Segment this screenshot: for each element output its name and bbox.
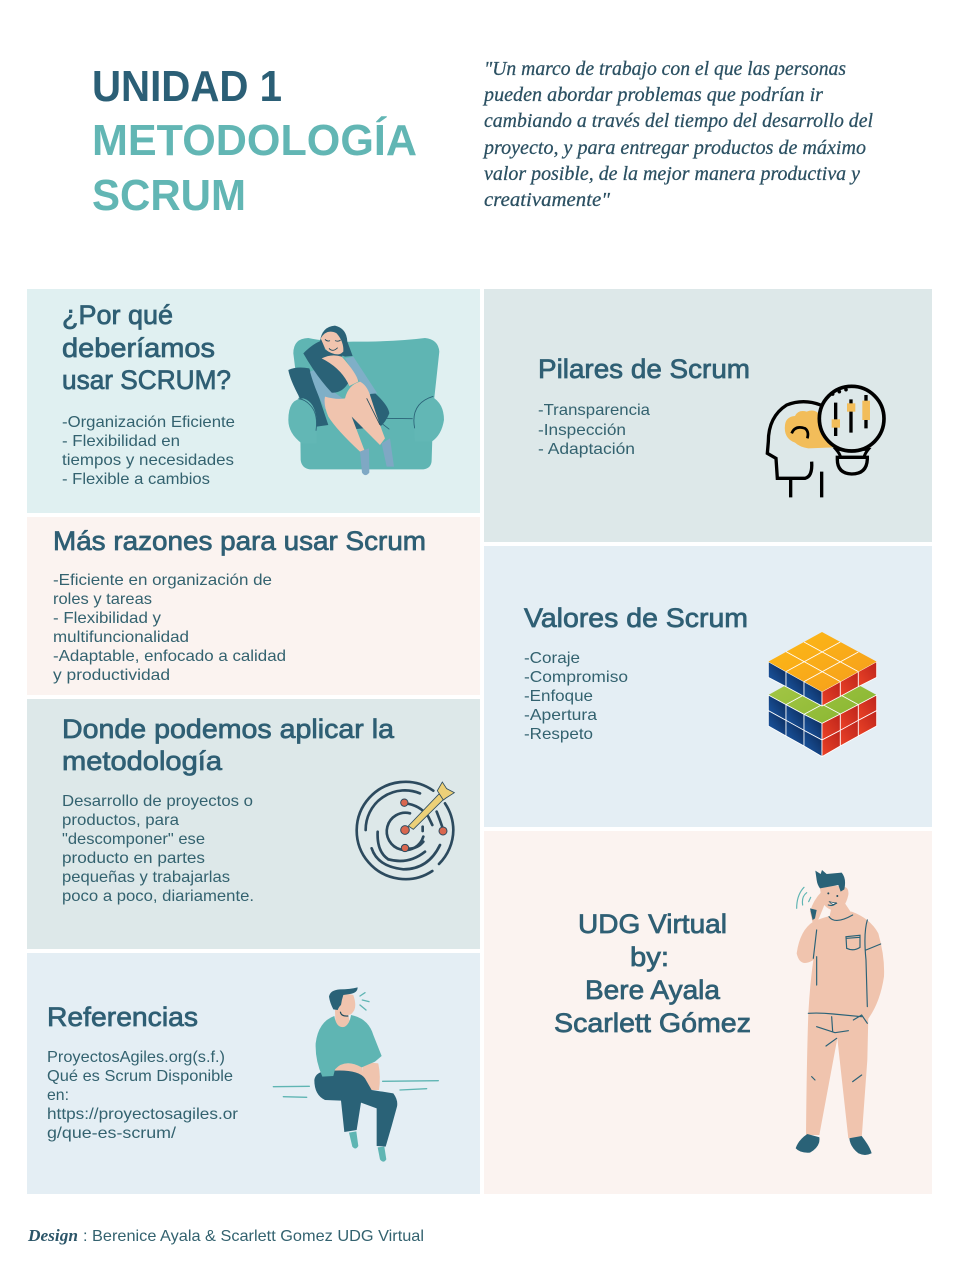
- text: donde aplicar: poco a poco, diariamente.: [62, 888, 254, 905]
- quote: [482, 58, 873, 211]
- heading: donde aplicar: metodología: [62, 746, 223, 776]
- text: valores: -Compromiso: [524, 669, 628, 686]
- text: por qué: - Flexible a cambios: [62, 471, 210, 488]
- panel: referencias: [27, 953, 480, 1194]
- heading: por qué: usar SCRUM?: [62, 365, 231, 395]
- panel: pilares: [484, 289, 932, 542]
- title: [92, 62, 417, 220]
- text: más razones: multifuncionalidad: [53, 629, 189, 646]
- text: por qué: - Flexibilidad en: [62, 433, 180, 450]
- text: por qué: [62, 414, 235, 488]
- panel: por qué usar Scrum: [27, 289, 480, 513]
- icon: seated man: [273, 987, 438, 1162]
- text: referencias: https://proyectosagiles.or: [47, 1106, 239, 1123]
- panel: donde aplicar: [27, 699, 480, 949]
- text: más razones: roles y tareas: [53, 591, 152, 608]
- title: METODOLOGÍA: [92, 115, 417, 165]
- text: pilares: [538, 402, 650, 458]
- title: SCRUM: [92, 171, 246, 220]
- quote: creativamente": [484, 189, 610, 211]
- heading: pilares: Pilares de Scrum: [538, 354, 750, 384]
- heading: por qué: ¿Por qué: [62, 300, 173, 330]
- text: referencias: g/que-es-scrum/: [47, 1125, 177, 1142]
- text: donde aplicar: Desarrollo de proyectos o: [62, 793, 253, 810]
- panel: valores: [484, 546, 932, 827]
- heading: donde aplicar: [62, 714, 395, 776]
- text: donde aplicar: [62, 793, 254, 905]
- heading: créditos: by:: [630, 942, 669, 972]
- heading: créditos: UDG Virtual: [578, 909, 727, 939]
- heading: créditos: [554, 909, 751, 1038]
- quote: proyecto, y para entregar productos de máximo: [482, 137, 866, 159]
- heading: donde aplicar: Donde podemos aplicar la: [62, 714, 395, 744]
- text: por qué: tiempos y necesidades: [62, 452, 234, 469]
- quote: valor posible, de la mejor manera productiva y: [484, 163, 861, 185]
- text: más razones: -Adaptable, enfocado a calidad: [53, 648, 286, 665]
- icon: standing man on phone: [796, 870, 884, 1155]
- text: donde aplicar: producto en partes: [62, 850, 205, 867]
- text: más razones: [53, 572, 286, 684]
- text: valores: [524, 650, 628, 743]
- text: pilares: -Transparencia: [538, 402, 650, 419]
- quote: "Un marco de trabajo con el que las personas: [484, 58, 846, 80]
- text: donde aplicar: pequeñas y trabajarlas: [62, 869, 230, 886]
- heading: créditos: Bere Ayala: [585, 975, 721, 1005]
- text: más razones: -Eficiente en organización de: [53, 572, 272, 589]
- text: valores: -Coraje: [524, 650, 580, 667]
- text: valores: -Enfoque: [524, 688, 593, 705]
- footer credit: Design: [27, 1226, 78, 1245]
- text: valores: -Apertura: [524, 707, 597, 724]
- heading: más razones: Más razones para usar Scrum: [53, 526, 426, 556]
- text: donde aplicar: "descomponer" ese: [62, 831, 205, 848]
- text: pilares: -Inspección: [538, 422, 626, 439]
- heading: créditos: Scarlett Gómez: [554, 1008, 751, 1038]
- text: referencias: Qué es Scrum Disponible: [47, 1068, 233, 1085]
- footer credit: : Berenice Ayala & Scarlett Gomez UDG Virtual: [83, 1228, 424, 1245]
- heading: por qué: [62, 300, 231, 395]
- heading: por qué: deberíamos: [62, 333, 215, 363]
- heading: valores: Valores de Scrum: [524, 603, 748, 633]
- text: más razones: y productividad: [53, 667, 170, 684]
- text: valores: -Respeto: [524, 726, 593, 743]
- icon: woman on sofa: [288, 326, 444, 475]
- icon: radar target: [357, 782, 454, 879]
- text: donde aplicar: productos, para: [62, 812, 179, 829]
- text: referencias: [47, 1049, 239, 1142]
- icon: layered cube: [768, 632, 877, 757]
- heading: referencias: Referencias: [47, 1002, 198, 1032]
- text: por qué: -Organización Eficiente: [62, 414, 235, 431]
- text: pilares: - Adaptación: [538, 441, 635, 458]
- text: referencias: ProyectosAgiles.org(s.f.): [47, 1049, 225, 1066]
- icon: head and light bulb: [767, 386, 884, 497]
- quote: cambiando a través del tiempo del desarrollo del: [484, 110, 873, 132]
- panel: más razones: [27, 517, 480, 695]
- title: UNIDAD 1: [92, 62, 282, 111]
- text: más razones: - Flexibilidad y: [53, 610, 161, 627]
- panel: créditos: [484, 831, 932, 1194]
- text: referencias: en:: [47, 1087, 69, 1104]
- quote: pueden abordar problemas que podrían ir: [482, 84, 824, 106]
